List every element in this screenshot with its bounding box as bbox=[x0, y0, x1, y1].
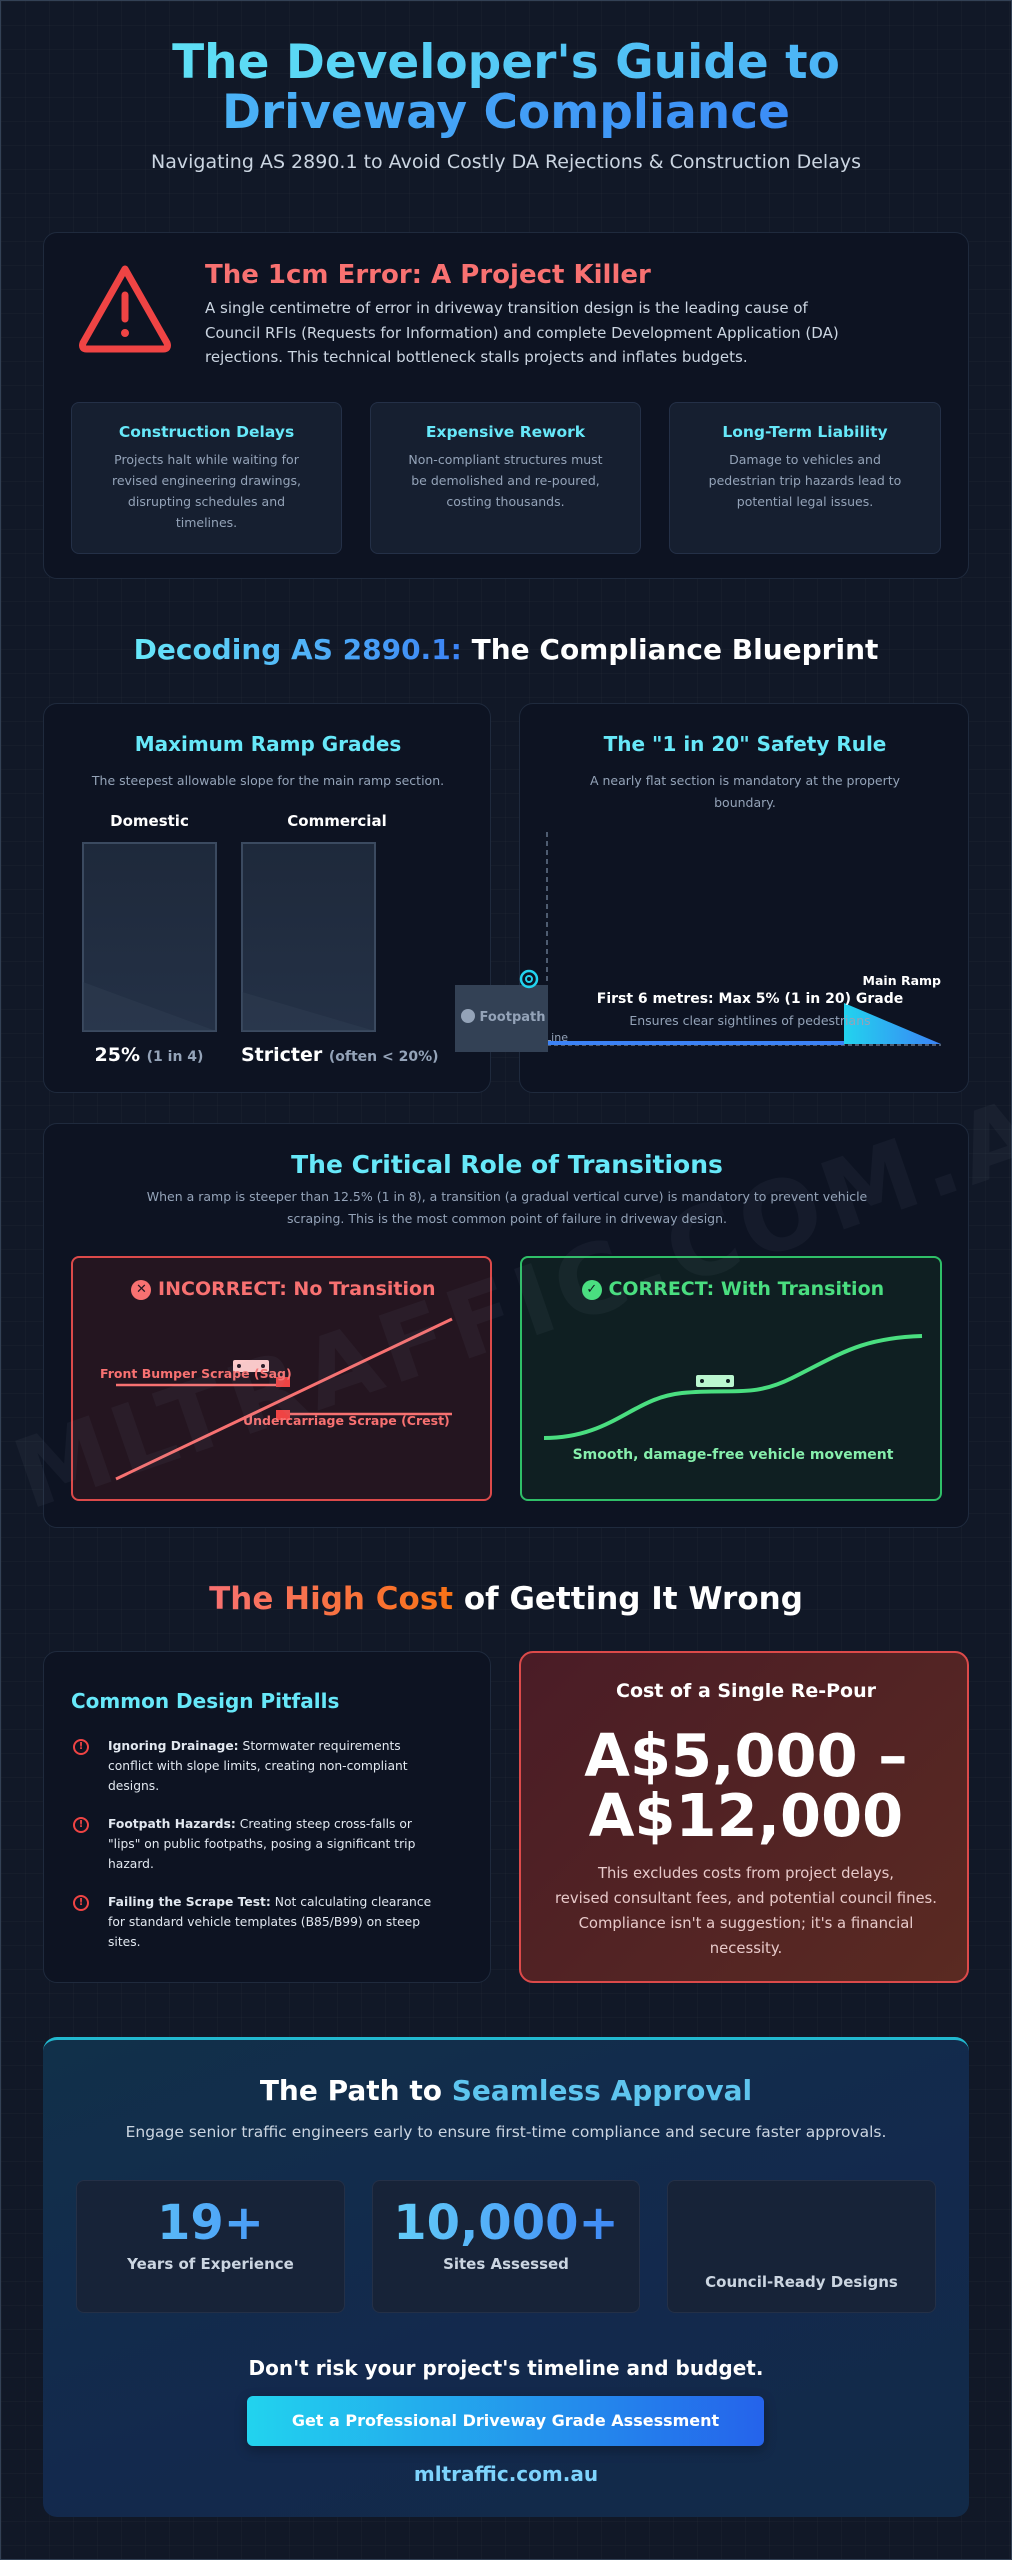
title: Driveway Compliance bbox=[222, 85, 790, 140]
button bbox=[247, 2396, 764, 2446]
panel: CTA: The Path to Seamless Approval bbox=[260, 2074, 752, 2107]
stat: sites bbox=[372, 2180, 640, 2313]
card: liability: Damage to vehicles and pedestrian trip hazards lead to potential legal issues. bbox=[709, 452, 901, 509]
button: Get a Professional Driveway Grade Assessment bbox=[292, 2411, 719, 2430]
stat: years bbox=[76, 2180, 345, 2313]
panel: cost: revised consultant fees, and potential council fines. Compliance isn't a suggestion; it's a financial necessity. bbox=[555, 1890, 937, 1957]
box: incorrect: Undercarriage Scrape (Crest) bbox=[243, 1413, 450, 1428]
body text bbox=[205, 299, 839, 366]
bar chart: 25% (1 in 4) bbox=[95, 1044, 203, 1066]
stat: sites: Sites Assessed bbox=[443, 2255, 569, 2273]
panel: transitions: The Critical Role of Transitions bbox=[291, 1150, 723, 1179]
box: correct: CORRECT: With Transition bbox=[608, 1278, 884, 1300]
panel: CTA: Don't risk your project's timeline and budget. bbox=[249, 2356, 763, 2380]
card: rework: Expensive Rework bbox=[426, 423, 585, 441]
heading: high cost: The High Cost of Getting It Wrong bbox=[209, 1581, 803, 1617]
card: liability: Long-Term Liability bbox=[722, 423, 888, 441]
panel: cost: Cost of a Single Re-Pour bbox=[616, 1680, 876, 1702]
title: The Developer's Guide to bbox=[172, 35, 840, 90]
stat: years: 19+ bbox=[157, 2195, 264, 2251]
stat: council-ready bbox=[667, 2180, 936, 2313]
panel: pitfalls bbox=[43, 1651, 491, 1983]
panel: ramp grades: The steepest allowable slope for the main ramp section. bbox=[92, 773, 444, 788]
heading: decoding: Decoding AS 2890.1: The Compliance Blueprint bbox=[134, 633, 878, 666]
heading: The 1cm Error: A Project Killer bbox=[205, 260, 651, 290]
list items: ! bbox=[79, 1819, 83, 1830]
list items: Footpath Hazards: Creating steep cross-falls or "lips" on public footpaths, posing a significant trip hazard. bbox=[108, 1817, 415, 1871]
card: liability bbox=[669, 402, 941, 554]
icon: warning triangle bbox=[79, 266, 171, 352]
bar chart: Domestic bbox=[110, 812, 189, 830]
bar chart: Stricter (often < 20%) bbox=[241, 1044, 439, 1066]
bar chart bbox=[82, 812, 439, 1066]
list items bbox=[73, 1739, 431, 1949]
box: incorrect: Front Bumper Scrape (Sag) bbox=[100, 1366, 292, 1381]
card: delays: Projects halt while waiting for revised engineering drawings, disrupting schedules and timelines. bbox=[112, 452, 301, 530]
card: delays: Construction Delays bbox=[119, 423, 294, 441]
stat: years: Years of Experience bbox=[127, 2255, 294, 2273]
panel: cost bbox=[519, 1651, 969, 1983]
box: correct: ✓ bbox=[586, 1282, 597, 1297]
panel: 1cm error bbox=[43, 232, 969, 579]
panel: transitions bbox=[43, 1123, 969, 1528]
panel: CTA bbox=[43, 2037, 969, 2517]
box: incorrect: ✕ bbox=[136, 1282, 147, 1297]
big number bbox=[584, 1721, 908, 1850]
card: rework bbox=[370, 402, 641, 554]
card: rework: Non-compliant structures must be demolished and re-poured, costing thousands. bbox=[408, 452, 603, 509]
list items: Ignoring Drainage: Stormwater requirements conflict with slope limits, creating non-compliant designs. bbox=[108, 1739, 408, 1793]
panel: transitions: When a ramp is steeper than 12.5% (1 in 8), a transition (a gradual vertical curve) is mandatory to prevent vehicle scraping. This is the most common point of failure in driveway design. bbox=[147, 1189, 867, 1226]
panel: CTA: mltraffic.com.au bbox=[414, 2462, 598, 2486]
card: delays bbox=[71, 402, 342, 554]
label: main ramp: Main Ramp bbox=[863, 973, 941, 988]
list items: ! bbox=[79, 1897, 83, 1908]
box: incorrect bbox=[71, 1256, 492, 1501]
label: property line: Property Line bbox=[495, 1031, 568, 1044]
bar chart: Commercial bbox=[287, 812, 387, 830]
list items: Failing the Scrape Test: Not calculating clearance for standard vehicle templates (B85/B99) on steep sites. bbox=[108, 1895, 431, 1949]
big number: A$12,000 bbox=[589, 1781, 903, 1850]
panel: ramp grades: Maximum Ramp Grades bbox=[135, 732, 401, 756]
footpath box bbox=[455, 985, 548, 1052]
box: correct bbox=[520, 1256, 942, 1501]
body text: A single centimetre of error in driveway transition design is the leading cause of bbox=[205, 299, 808, 317]
panel: 1 in 20 rule bbox=[519, 703, 969, 1093]
panel: cost: This excludes costs from project delays, bbox=[598, 1865, 894, 1882]
stat: council-ready: Council-Ready Designs bbox=[705, 2273, 898, 2291]
footpath box: Footpath bbox=[480, 1010, 546, 1025]
diagram: 1 in 20: Ensures clear sightlines of pedestrians bbox=[629, 1013, 871, 1028]
big number: A$5,000 – bbox=[584, 1721, 908, 1790]
diagram: 1 in 20 bbox=[455, 832, 941, 1052]
panel: pitfalls: Common Design Pitfalls bbox=[71, 1689, 339, 1713]
icon: pin bbox=[520, 970, 538, 988]
box: correct: Smooth, damage-free vehicle movement bbox=[573, 1447, 893, 1463]
panel: CTA: Engage senior traffic engineers early to ensure first-time compliance and secure faster approvals. bbox=[126, 2123, 886, 2141]
subtitle: Navigating AS 2890.1 to Avoid Costly DA Rejections & Construction Delays bbox=[151, 151, 861, 173]
stat: sites: 10,000+ bbox=[393, 2195, 619, 2251]
body text: Council RFIs (Requests for Information) and complete Development Application (DA) rejections. This technical bottleneck stalls projects and inflates budgets. bbox=[205, 324, 839, 366]
panel: ramp grades bbox=[43, 703, 491, 1093]
panel: 1 in 20 rule: The "1 in 20" Safety Rule bbox=[604, 732, 886, 756]
panel: 1 in 20 rule: A nearly flat section is mandatory at the property boundary. bbox=[590, 773, 900, 810]
list items: ! bbox=[79, 1741, 83, 1752]
label: first 6 metres: First 6 metres: Max 5% (1 in 20) Grade bbox=[597, 991, 903, 1007]
title bbox=[172, 35, 840, 140]
box: incorrect: INCORRECT: No Transition bbox=[158, 1278, 436, 1300]
